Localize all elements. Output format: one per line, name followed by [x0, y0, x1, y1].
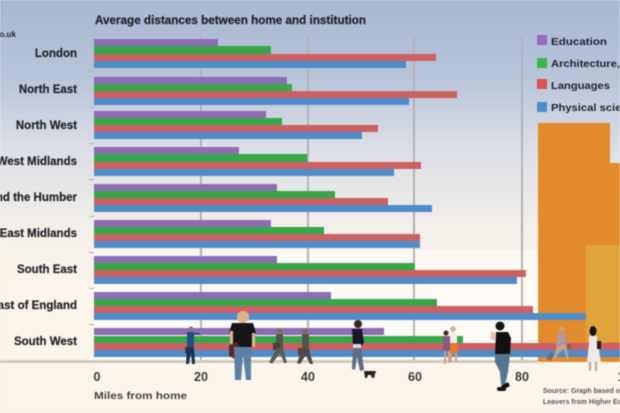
bars: North West — [94, 111, 378, 139]
region labels: North West — [16, 120, 77, 132]
x axis numbers: 20 — [194, 370, 208, 384]
person: woman in black jacket with dog — [352, 320, 376, 378]
bars: London — [94, 39, 436, 68]
axis label: Miles from home — [94, 390, 187, 402]
x axis numbers: 0 — [94, 370, 101, 384]
bars: North East — [94, 77, 457, 105]
bars: East Midlands — [94, 220, 420, 248]
legend: Languages — [551, 80, 610, 92]
bars: West Midlands — [94, 147, 421, 176]
bar chart — [94, 39, 620, 357]
region labels: London — [35, 48, 77, 60]
person: faded figure with suitcase — [546, 326, 571, 361]
region labels: South West — [14, 336, 77, 348]
person: large man in black from behind — [491, 322, 511, 391]
x axis numbers: 60 — [408, 370, 422, 384]
legend — [537, 35, 620, 114]
person: small man in blue — [185, 326, 200, 364]
bars: South West — [94, 328, 620, 357]
source note — [543, 388, 620, 406]
title: Average distances between home and institution — [95, 15, 366, 27]
orange background blocks — [538, 123, 620, 362]
bars: East of England — [94, 292, 586, 320]
bars: South East — [94, 256, 526, 284]
bars: Yorkshire and the Humber — [94, 184, 432, 212]
person: large man in black t-shirt — [229, 311, 256, 380]
region labels: East Midlands — [0, 228, 77, 240]
x axis numbers — [94, 370, 620, 384]
region labels: South East — [17, 264, 77, 276]
gridlines — [89, 35, 523, 361]
region labels — [0, 48, 78, 348]
legend: Education — [551, 36, 607, 48]
legend: Architecture, — [551, 58, 620, 70]
person: couple walking — [443, 326, 459, 364]
person: walker with bag — [269, 328, 287, 364]
person: woman in white skirt — [587, 326, 601, 371]
x axis numbers: 80 — [515, 370, 529, 384]
axis baseline — [0, 360, 538, 363]
region labels: North East — [19, 84, 77, 96]
person: second walker with bag — [297, 328, 313, 364]
x axis numbers: 40 — [301, 370, 315, 384]
